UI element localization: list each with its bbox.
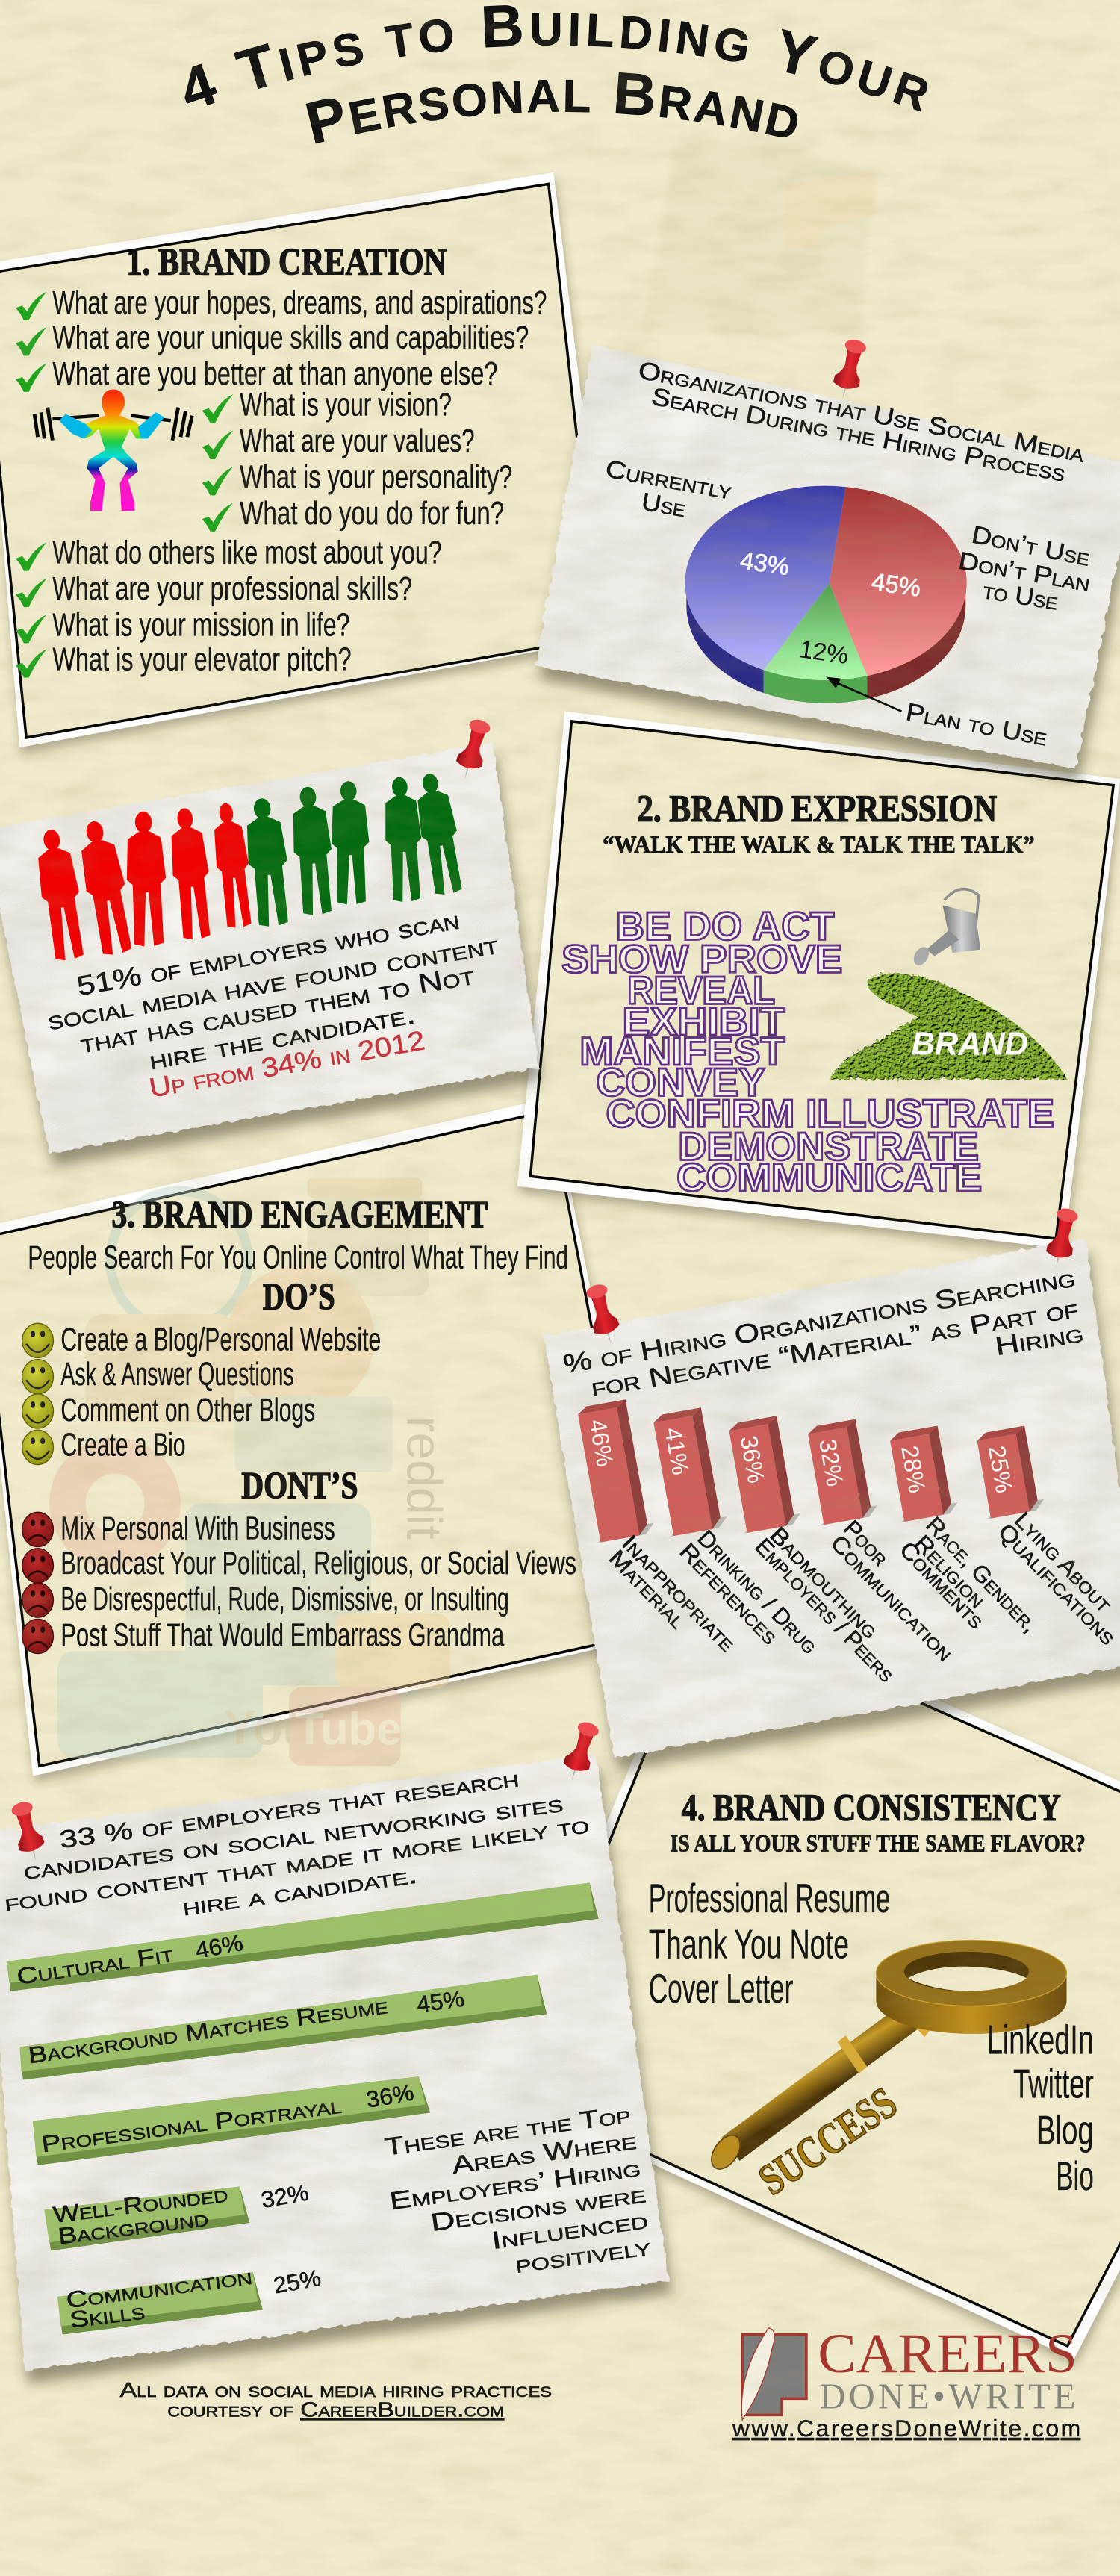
frame <box>496 1593 1120 2359</box>
icon: push pin <box>582 1282 623 1347</box>
bar labels: Comments <box>895 1537 990 1634</box>
source credit: All data on social media hiring practices <box>120 2378 552 2401</box>
paper sheet <box>0 1755 668 2371</box>
bar chart: Communication <box>65 2263 254 2313</box>
paper sheet <box>0 743 538 1154</box>
website url: www.CareersDoneWrite.com <box>732 2415 1080 2442</box>
side note: Employers’ Hiring <box>388 2153 642 2215</box>
list: donts: Mix Personal With Business <box>60 1511 335 1547</box>
list: documents: Professional Resume <box>649 1875 890 1921</box>
icon: grass mound with brand <box>830 974 1068 1080</box>
bar chart: 36% <box>735 1434 770 1485</box>
icon: push pin <box>1043 1206 1081 1271</box>
ghost social media logos: reddit <box>396 1416 452 1540</box>
chart labels <box>603 455 1092 750</box>
frame <box>517 712 1120 1248</box>
bar chart <box>7 1882 599 2335</box>
chart labels: Currently <box>603 455 735 505</box>
bar chart: 46% <box>193 1929 245 1964</box>
word cloud: expression verbs: EXHIBIT <box>623 1000 785 1044</box>
bar chart: Well-Rounded <box>52 2180 229 2228</box>
statistic text: hire the candidate. <box>147 998 417 1075</box>
side note: Areas Where <box>450 2127 638 2179</box>
bar labels: Communication <box>826 1530 959 1666</box>
icon: push pin <box>452 717 494 783</box>
bar chart: 41% <box>659 1425 694 1477</box>
arrow: plan to use <box>826 677 901 712</box>
pie chart: 43% <box>738 546 791 580</box>
question list: What is your personality? <box>240 458 512 495</box>
bar chart: Cultural Fit <box>15 1941 175 1990</box>
word cloud: expression verbs: REVEAL <box>627 968 775 1012</box>
word cloud: expression verbs: CONFIRM ILLUSTRATE <box>606 1092 1054 1136</box>
bar labels: Religion <box>909 1530 991 1613</box>
bar labels: Lying About <box>1009 1507 1117 1617</box>
question list: What are your values? <box>240 423 475 459</box>
ghost social media logos <box>49 1178 452 1766</box>
source credit <box>120 2378 552 2421</box>
statistic text: social media have found content <box>45 929 500 1036</box>
title: PERSONAL BRAND <box>306 72 797 143</box>
chart labels: to Use <box>981 576 1060 615</box>
list: dos: Create a Blog/Personal Website <box>60 1322 381 1358</box>
chart heading: % of Hiring Organizations Searching <box>561 1263 1077 1379</box>
panel: positive content bar chart paper <box>0 1719 668 2371</box>
background ghost logo <box>642 131 875 334</box>
wordmark: CAREERS <box>818 2323 1077 2385</box>
bar labels: Qualifications <box>993 1518 1120 1650</box>
bar chart: 28% <box>896 1443 931 1495</box>
question list: What are your unique skills and capabilities? <box>52 319 529 355</box>
list: online profiles <box>987 2016 1094 2199</box>
icon: grass mound with brand: BRAND <box>912 1026 1028 1063</box>
panel: social media search pie chart paper <box>535 337 1120 769</box>
panel: negative material bar chart paper <box>544 1206 1120 1758</box>
panel: brand consistency <box>496 1593 1120 2359</box>
word cloud: expression verbs: DEMONSTRATE <box>678 1124 979 1169</box>
bar labels: References <box>674 1538 783 1649</box>
question list: What is your elevator pitch? <box>52 641 352 678</box>
subheading: “WALK THE WALK & TALK THE TALK” <box>603 832 1035 859</box>
chart heading: Organizations that Use Social Media <box>636 356 1087 467</box>
bar chart <box>573 1399 1046 1543</box>
icon: watering can <box>911 889 980 968</box>
chart heading <box>3 1764 591 1920</box>
logo: careers done write <box>732 2323 1080 2442</box>
icon: golden key: SUCCESS <box>750 2077 905 2205</box>
chart heading: for Negative “Material” as Part of <box>589 1294 1080 1402</box>
list: documents: Cover Letter <box>649 1965 793 2012</box>
question list: What is your mission in life? <box>52 606 349 644</box>
icon: rainbow weightlifter <box>34 389 192 511</box>
list: dos <box>22 1322 381 1465</box>
icon: check marks <box>16 292 233 678</box>
word cloud: expression verbs: SHOW PROVE <box>561 938 842 982</box>
list: dos: Ask & Answer Questions <box>60 1356 294 1393</box>
icon: push pin <box>559 1719 603 1785</box>
icon: quill mark <box>741 2328 806 2420</box>
side note <box>383 2100 653 2278</box>
list: donts: Be Disrespectful, Rude, Dismissive, or Insulting <box>60 1581 509 1617</box>
bar labels: Poor <box>839 1515 894 1571</box>
question list: What is your vision? <box>240 387 452 423</box>
chart labels: Plan to Use <box>904 697 1049 750</box>
heading: 2. BRAND EXPRESSION <box>637 788 997 830</box>
bar labels: Material <box>604 1545 691 1634</box>
chart heading: Search During the Hiring Process <box>650 382 1068 487</box>
question list: What are your hopes, dreams, and aspirations? <box>52 284 547 321</box>
bar labels: Employers / Peers <box>750 1533 900 1687</box>
list: donts: Broadcast Your Political, Religious, or Social Views <box>60 1545 576 1581</box>
source credit: courtesy of CareerBuilder.com <box>167 2398 504 2421</box>
bar chart: Background <box>57 2205 210 2249</box>
wordmark line 2: DONE•WRITE <box>820 2377 1076 2417</box>
word cloud: expression verbs: CONVEY <box>596 1061 765 1105</box>
paper sheet <box>535 345 1120 769</box>
chart labels: Don’t Plan <box>956 547 1092 597</box>
question list: What are your professional skills? <box>52 570 412 607</box>
statistic text: that has caused them to Not <box>78 959 476 1059</box>
bar chart: Professional Portrayal <box>40 2092 343 2157</box>
chart heading: Hiring <box>993 1319 1086 1361</box>
side note: Decisions were <box>429 2180 647 2236</box>
icon: push pin <box>830 337 870 402</box>
chart labels: Use <box>640 488 688 522</box>
question list: What are you better at than anyone else? <box>52 355 497 392</box>
list: documents <box>649 1875 890 2012</box>
bar chart: Skills <box>68 2298 146 2333</box>
chart heading: hire a candidate. <box>181 1861 419 1920</box>
heading: 3. BRAND ENGAGEMENT <box>112 1194 488 1236</box>
bar chart: 32% <box>814 1437 849 1488</box>
question list: What do others like most about you? <box>52 535 442 571</box>
heading: 1. BRAND CREATION <box>126 240 447 282</box>
word cloud: expression verbs <box>561 905 1054 1200</box>
icon: golden key <box>706 1941 1067 2205</box>
bar labels: Race, Gender, <box>921 1512 1043 1637</box>
chart heading: candidates on social networking sites <box>22 1789 564 1885</box>
list: donts <box>22 1511 576 1654</box>
chart heading: found content that made it more likely to <box>3 1810 591 1917</box>
chart heading <box>561 1263 1086 1402</box>
list: online profiles: Blog <box>1036 2106 1094 2153</box>
bar chart: 32% <box>259 2179 311 2213</box>
red silhouettes <box>31 801 256 962</box>
panel: brand engagement <box>0 1098 660 1776</box>
statistic text: 51% of employers who scan <box>75 904 461 1001</box>
frame <box>0 172 611 747</box>
heading: donts: DONT’S <box>241 1465 358 1507</box>
list: dos: Create a Bio <box>60 1426 186 1463</box>
bar labels: Drinking / Drug <box>693 1525 823 1659</box>
list: documents: Thank You Note <box>649 1921 849 1967</box>
question list <box>52 284 547 678</box>
list: donts: Post Stuff That Would Embarrass Grandma <box>60 1617 505 1654</box>
bar labels <box>604 1507 1120 1687</box>
side note: positively <box>514 2233 653 2278</box>
list: dos: Comment on Other Blogs <box>60 1392 315 1428</box>
bar chart: 25% <box>983 1443 1018 1495</box>
pie chart: 12% <box>797 635 850 669</box>
tagline: People Search For You Online Control What They Find <box>28 1239 568 1276</box>
chart heading <box>636 356 1087 487</box>
side note: Influenced <box>490 2206 650 2254</box>
bar chart: Background Matches Resume <box>27 1992 390 2068</box>
statistic text <box>45 904 500 1104</box>
paper sheet <box>544 1239 1120 1758</box>
statistic text: Up from 34% in 2012 <box>147 1024 427 1104</box>
chart labels: Don’t Use <box>969 520 1092 571</box>
heading: dos: DO’S <box>263 1276 335 1318</box>
bar chart: 36% <box>364 2079 416 2113</box>
pie chart <box>685 486 967 703</box>
ghost social media logos: Tube <box>296 1704 402 1755</box>
panel: brand expression <box>517 712 1120 1248</box>
chart heading: 33 % of employers that research <box>57 1764 520 1853</box>
frame <box>0 1098 660 1776</box>
panel: brand creation <box>0 172 611 747</box>
green silhouettes <box>242 771 467 928</box>
pie chart: 45% <box>870 567 923 602</box>
bar labels: Inappropriate <box>617 1530 741 1657</box>
bar chart: 45% <box>415 1985 466 2017</box>
icon: push pin <box>7 1799 49 1864</box>
question list: What do you do for fun? <box>240 495 504 532</box>
bar chart: 46% <box>584 1417 619 1469</box>
word cloud: expression verbs: COMMUNICATE <box>676 1156 982 1200</box>
bar labels: Badmouthing <box>765 1522 884 1643</box>
word cloud: expression verbs: BE DO ACT <box>616 905 834 949</box>
side note: These are the Top <box>383 2100 632 2161</box>
word cloud: expression verbs: MANIFEST <box>579 1030 785 1074</box>
list: online profiles: Bio <box>1056 2153 1094 2199</box>
panel: silhouettes paper <box>0 717 538 1154</box>
ghost social media logos: You <box>223 1700 313 1755</box>
bar chart: 25% <box>272 2265 323 2298</box>
